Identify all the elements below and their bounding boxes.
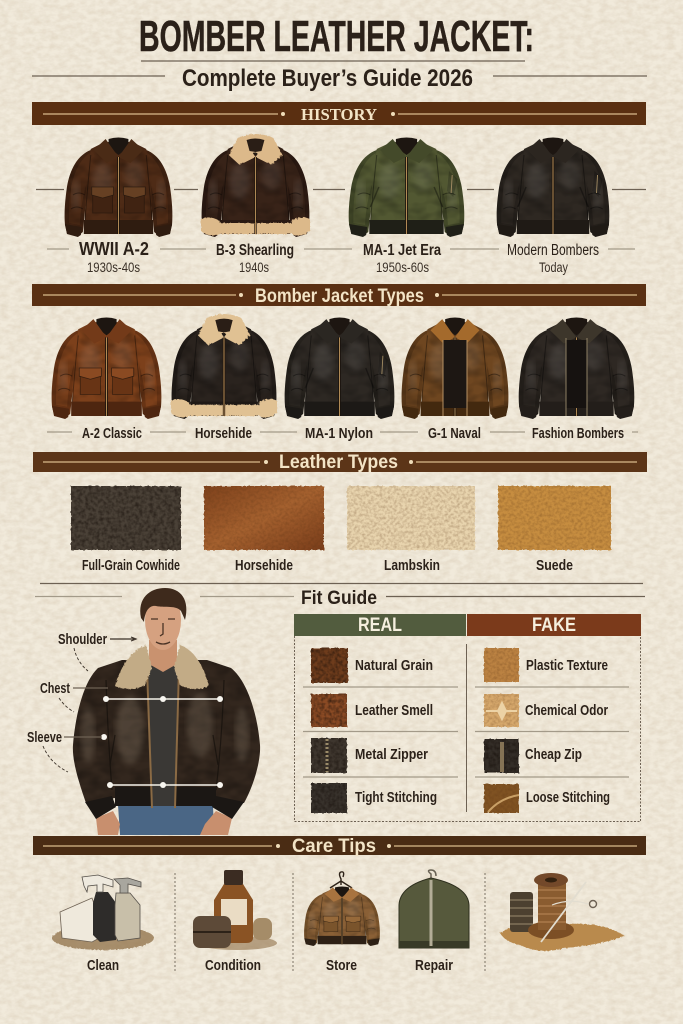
labels: types: G-1 Naval: [428, 426, 481, 442]
row: metal zipper: [311, 738, 428, 773]
row: plastic texture: [484, 648, 608, 682]
header: fake: FAKE: [532, 615, 576, 636]
labels: types: MA-1 Nylon: [305, 426, 373, 442]
section banner: care tips: [33, 836, 646, 857]
callout: shoulder: Shoulder: [58, 632, 107, 648]
jacket: Modern Bombers: [497, 138, 609, 237]
table frame: [294, 636, 640, 822]
jacket: MA-1 Nylon: [285, 318, 394, 419]
icon: repair garment bag: [399, 870, 469, 948]
labels: types: A-2 Classic: [82, 426, 142, 442]
callout: shoulder: [58, 632, 136, 671]
row: chemical odor: [484, 694, 608, 727]
labels: leather types: Full-Grain Cowhide: [82, 558, 180, 574]
row: natural grain: [311, 648, 433, 683]
icon: condition: [193, 870, 277, 950]
neck and head: [149, 640, 177, 672]
labels: history: Today: [539, 260, 568, 275]
labels: leather types: Lambskin: [384, 558, 440, 574]
callout: sleeve: [27, 730, 102, 772]
jacket: B-3 Shearling: [201, 134, 310, 237]
jacket: A-2 Classic: [52, 318, 161, 419]
callout: sleeve: Sleeve: [27, 730, 62, 746]
hands: [96, 811, 120, 835]
labels: history: 1940s: [239, 260, 269, 275]
callout: chest: [40, 681, 108, 712]
panel: history: [32, 102, 646, 275]
section banner: history: [32, 102, 646, 125]
labels: care tips: Repair: [415, 958, 453, 974]
labels: care tips: [87, 958, 453, 974]
header: real: [294, 614, 466, 636]
measurement lines: [101, 696, 223, 788]
tee: [148, 660, 178, 806]
labels: care tips: Condition: [205, 958, 261, 974]
callout: chest: Chest: [40, 681, 70, 697]
labels: history: MA-1 Jet Era: [363, 242, 441, 259]
jacket: Fashion Bombers: [519, 318, 634, 419]
swatch: suede: [498, 486, 611, 550]
row: natural grain: Natural Grain: [355, 658, 433, 674]
labels: leather types: Suede: [536, 558, 573, 574]
labels: history: 1950s-60s: [376, 260, 429, 275]
leather jacket: [73, 660, 260, 806]
face features: [151, 619, 175, 644]
row: chemical odor: Chemical Odor: [525, 703, 608, 719]
labels: care tips: Store: [326, 958, 357, 974]
labels: care tips: Clean: [87, 958, 119, 974]
jacket: WWII A-2: [65, 138, 172, 237]
jacket: G-1 Naval: [402, 318, 508, 419]
row: loose stitching: [484, 784, 610, 813]
labels: history: Modern Bombers: [507, 242, 599, 259]
jeans: [118, 805, 214, 835]
labels: types: Fashion Bombers: [532, 426, 624, 442]
jacket: MA-1 Jet Era: [349, 138, 464, 237]
labels: leather types: Horsehide: [235, 558, 293, 574]
section banner: history: HISTORY: [301, 105, 377, 124]
swatch: lambskin: [347, 486, 475, 550]
icon: clean: [52, 875, 154, 950]
swatch: full-grain cowhide: [71, 486, 181, 550]
labels: history: WWII A-2: [79, 239, 149, 259]
shearling collar: [115, 645, 209, 689]
header: real: REAL: [358, 615, 402, 636]
labels: types: Horsehide: [195, 426, 252, 442]
labels: history: B-3 Shearling: [216, 242, 294, 259]
section banner: types: [32, 284, 646, 307]
row: loose stitching: Loose Stitching: [526, 790, 610, 806]
panel: real vs fake table: [294, 614, 641, 822]
panel: care tips: [33, 836, 646, 974]
icon: thread and needle: [500, 873, 625, 951]
section banner: care tips: Care Tips: [292, 836, 376, 857]
figure: man wearing jacket: [73, 588, 260, 835]
row: tight stitching: Tight Stitching: [355, 790, 437, 806]
panel: bomber jacket types: [32, 284, 646, 442]
panel: leather types: [33, 452, 647, 574]
swatch: horsehide: [204, 486, 324, 550]
labels: history: [47, 239, 635, 275]
timeline: [36, 188, 646, 190]
row: leather smell: [311, 694, 433, 727]
heading: fit guide: Fit Guide: [301, 588, 377, 609]
section banner: types: Bomber Jacket Types: [255, 286, 424, 307]
row: metal zipper: Metal Zipper: [355, 747, 428, 763]
hair: [140, 588, 186, 622]
row: tight stitching: [311, 783, 437, 813]
row: cheap zip: Cheap Zip: [525, 747, 582, 763]
labels: history: 1930s-40s: [87, 260, 140, 275]
section banner: leather types: [33, 452, 647, 473]
section banner: leather types: Leather Types: [279, 452, 398, 473]
row: cheap zip: [484, 739, 582, 773]
row: leather smell: Leather Smell: [355, 703, 433, 719]
labels: types: [47, 426, 638, 442]
subtitle: Complete Buyer’s Guide 2026: [182, 65, 473, 92]
row: plastic texture: Plastic Texture: [526, 658, 608, 674]
jacket: Horsehide: [171, 314, 277, 419]
header: fake: [467, 614, 641, 636]
labels: leather types: [82, 558, 573, 574]
icon: store jacket: [304, 872, 380, 946]
